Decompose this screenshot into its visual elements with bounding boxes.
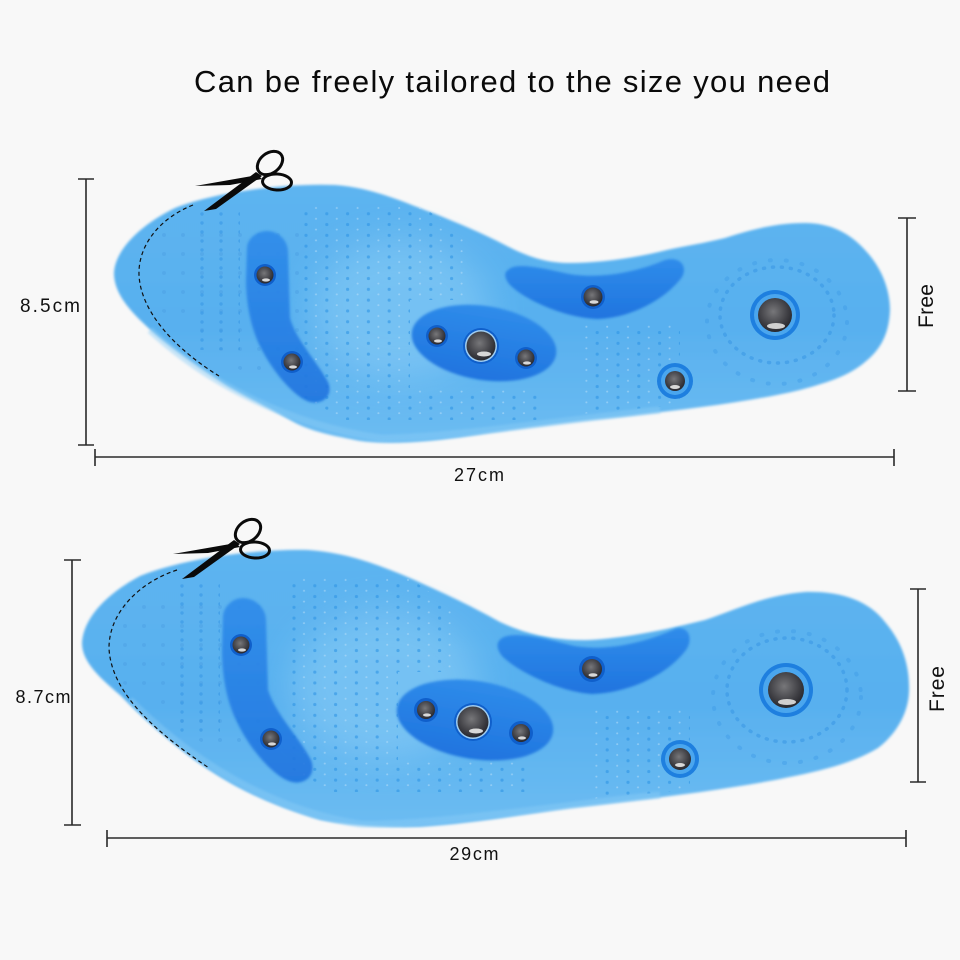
magnet bbox=[515, 347, 537, 369]
label: Free upper: Free bbox=[915, 284, 938, 328]
forefoot light area bbox=[310, 240, 490, 380]
lower edge highlight bbox=[150, 330, 660, 438]
forefoot light area bbox=[290, 610, 480, 760]
insole outline bbox=[114, 185, 890, 443]
label: 27cm: 27cm bbox=[454, 465, 504, 485]
icon: scissors, upper bbox=[195, 147, 292, 211]
cut line: lower bbox=[109, 570, 209, 768]
main dot field bbox=[300, 205, 540, 420]
lower edge highlight bbox=[130, 700, 660, 824]
insole: lower, 29cm bbox=[82, 550, 909, 827]
dimension: upper length 27cm bbox=[95, 449, 894, 466]
toe pad bbox=[222, 598, 313, 783]
toe pad bbox=[246, 231, 330, 403]
magnet, ringed bbox=[661, 740, 699, 778]
main dot field bbox=[288, 577, 528, 792]
magnet bbox=[254, 264, 276, 286]
mid dot field bbox=[590, 710, 690, 799]
icon: scissors, lower bbox=[173, 515, 270, 579]
magnet bbox=[579, 656, 605, 682]
magnet bbox=[414, 698, 438, 722]
magnet bbox=[230, 634, 252, 656]
left toe faint dots bbox=[111, 602, 261, 742]
dimension: lower length 29cm bbox=[107, 830, 906, 847]
magnet bbox=[260, 728, 282, 750]
arch pad bbox=[498, 628, 690, 694]
label: 8.5cm: 8.5cm bbox=[20, 296, 80, 317]
heel dot ring bbox=[720, 267, 834, 363]
magnet bbox=[281, 351, 303, 373]
magnet bbox=[426, 325, 448, 347]
toe column dots bbox=[200, 212, 240, 350]
magnet bbox=[581, 285, 605, 309]
heel dot ring bbox=[727, 638, 847, 742]
arch pad bbox=[505, 259, 684, 319]
magnet, large bbox=[463, 328, 499, 364]
magnet bbox=[509, 721, 533, 745]
label: 8.7cm: 8.7cm bbox=[16, 687, 70, 707]
toe column dots bbox=[180, 584, 220, 732]
label: Free lower: Free bbox=[926, 666, 949, 712]
dimension: lower Free bbox=[910, 589, 926, 782]
ball pad bbox=[391, 669, 559, 771]
cut line: upper bbox=[139, 205, 219, 376]
insole: upper, 27cm bbox=[114, 185, 890, 443]
label: 29cm: 29cm bbox=[450, 844, 498, 864]
magnet, ringed bbox=[657, 363, 693, 399]
heel magnet, ringed bbox=[750, 290, 800, 340]
insole outline bbox=[82, 550, 909, 827]
dimension: upper width 8.5cm bbox=[78, 179, 94, 445]
title: Can be freely tailored to the size you need bbox=[194, 64, 830, 99]
dimension: upper Free bbox=[898, 218, 916, 391]
mid dot field bbox=[580, 325, 680, 414]
dimension: lower width 8.7cm bbox=[64, 560, 81, 825]
heel outer dots bbox=[707, 260, 847, 384]
magnet, large bbox=[454, 703, 492, 741]
left toe dots bbox=[150, 230, 300, 370]
heel outer dots bbox=[713, 631, 861, 763]
heel magnet, ringed bbox=[759, 663, 813, 717]
ball pad bbox=[406, 295, 562, 391]
